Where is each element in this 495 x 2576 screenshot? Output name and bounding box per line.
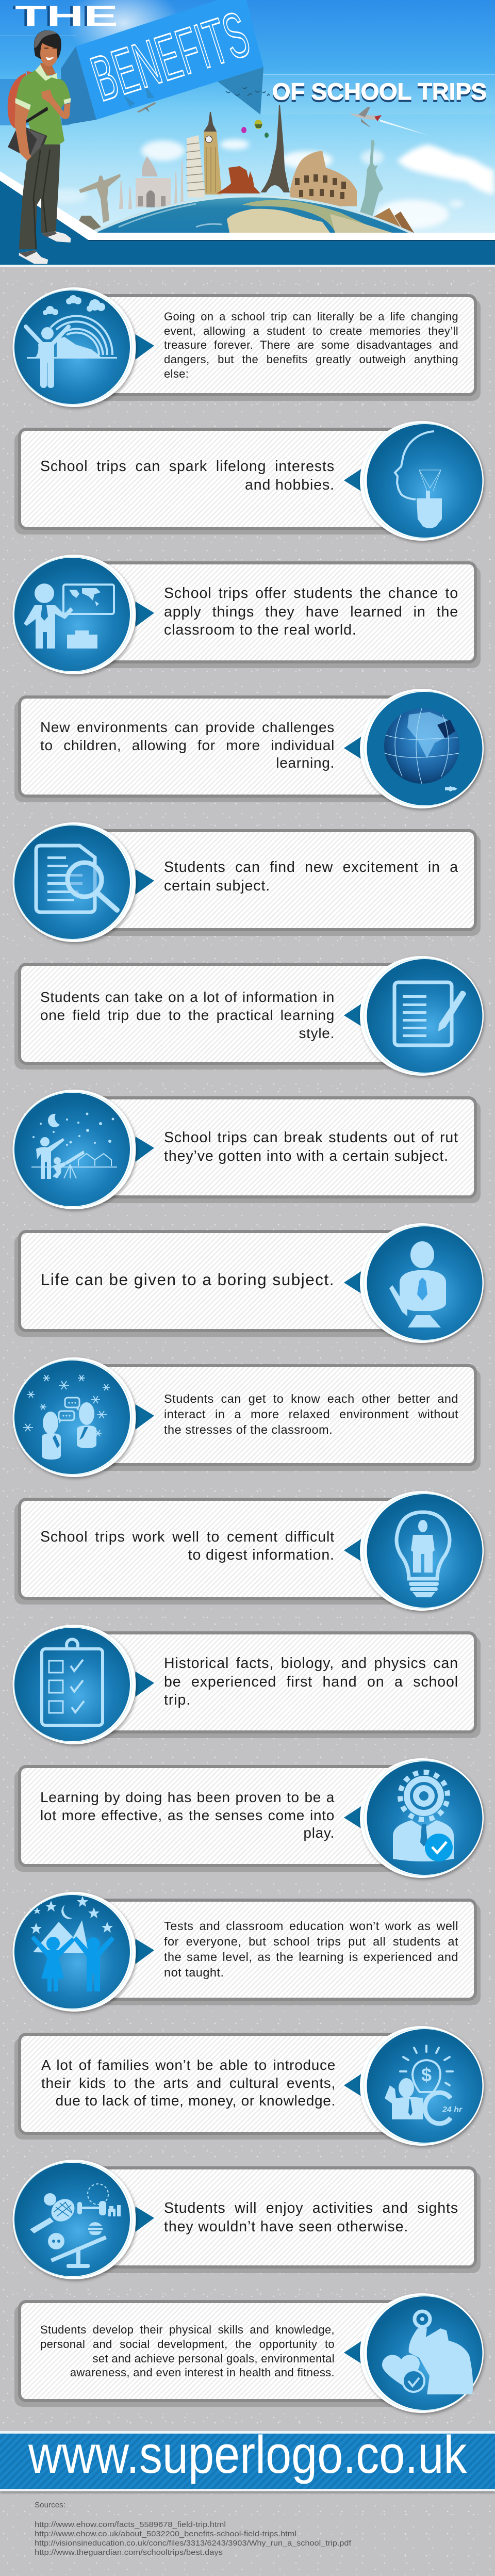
card background <box>93 294 477 396</box>
card background <box>18 1230 402 1332</box>
text: level playing field: not taught. <box>164 1966 224 1979</box>
card background <box>93 1899 477 2001</box>
panel: learning by doing <box>14 1758 487 1881</box>
title: THE <box>12 0 118 32</box>
source links: http://www.ehow.com/facts_5589678_field-trip.html <box>35 2520 226 2529</box>
airplane near ribbon <box>124 84 156 112</box>
text: activities and sights: Students will enjoy activities and sights <box>164 2200 458 2216</box>
student character <box>8 30 71 264</box>
text: get to know each other: the stresses of the classroom. <box>164 1423 333 1436</box>
text: get to know each other: interact in a more relaxed environment without <box>164 1407 458 1421</box>
sky glow <box>67 0 180 62</box>
icon: conversation in snow <box>12 1357 155 1481</box>
source links: http://www.theguardian.com/schooltrips/best.days <box>35 2548 223 2557</box>
icon: teacher with world map <box>12 554 155 678</box>
text: new environments: New environments can provide challenges <box>40 719 335 735</box>
landmark: Big Ben <box>204 112 222 195</box>
text: level playing field <box>164 1919 458 1979</box>
card background <box>93 2166 477 2269</box>
landmark: Statue of Liberty <box>359 140 383 221</box>
text: physical and personal development: awareness, and even interest in health and fitness. <box>70 2366 335 2379</box>
birds <box>226 87 270 96</box>
panel: get to know each other <box>12 1357 481 1481</box>
text: arts and cultural events: A lot of families won’t be able to introduce <box>41 2057 336 2073</box>
card background <box>18 963 402 1065</box>
landmark: pyramids <box>374 208 414 233</box>
icon: jigsaw globe <box>343 688 487 812</box>
icon: notepad and pen <box>343 955 487 1079</box>
title: THE: THE <box>15 0 118 32</box>
panel: arts and cultural events <box>14 2026 487 2149</box>
text: introduction: dangers, but the benefits greatly outweigh anything <box>164 353 458 366</box>
card background <box>18 695 402 798</box>
text: new environments <box>40 719 335 771</box>
landmark: Christ the Redeemer <box>79 174 121 223</box>
panel: new excitement <box>12 822 481 945</box>
text: boring subject: Life can be given to a boring subject. <box>41 1270 335 1289</box>
sources heading: Sources: <box>35 2501 65 2509</box>
landmark: Mayan pyramid <box>74 216 101 231</box>
panel: apply learning <box>12 554 481 678</box>
text: practical learning: one field trip due to the practical learning <box>40 1007 335 1023</box>
text: get to know each other <box>164 1392 458 1436</box>
text: introduction <box>164 310 458 380</box>
panel: introduction <box>12 287 481 411</box>
text: learning by doing: play. <box>303 1825 335 1841</box>
text: break out of rut: School trips can break students out of rut <box>164 1129 458 1146</box>
landmark: Eiffel Tower <box>260 105 290 192</box>
text: level playing field: the same level, as the learning is experienced and <box>164 1950 458 1964</box>
card background <box>93 829 477 931</box>
icon: head with light bulb <box>343 421 487 544</box>
text: new excitement <box>164 859 458 894</box>
icon: checklist clipboard <box>12 1624 155 1748</box>
text: learning by doing: lot more effective, as the senses come into <box>40 1807 335 1823</box>
text: introduction: Going on a school trip can literally be a life changing <box>164 310 458 323</box>
text: activities and sights: they wouldn’t have seen otherwise. <box>164 2218 408 2235</box>
icon: document with magnifier <box>12 822 155 945</box>
text: physical and personal development: personal and social development, the opportunity to <box>40 2338 335 2351</box>
icon: person writing <box>343 1223 487 1347</box>
contrail <box>379 119 430 136</box>
text: level playing field: Tests and classroom education won’t work as well <box>164 1919 458 1933</box>
text: get to know each other: Students can get to know each other better and <box>164 1392 458 1405</box>
text: level playing field: for everyone, but school trips put all students at <box>164 1935 458 1948</box>
card background <box>18 428 402 530</box>
card background <box>93 561 477 663</box>
text: experience first hand <box>164 1655 458 1708</box>
ribbon folds <box>61 46 263 125</box>
card background <box>93 1631 477 1733</box>
panel: new environments <box>14 688 487 812</box>
source links: http://www.ehow.co.uk/about_5032200_benefits-school-field-trips.html <box>35 2530 296 2538</box>
card background <box>93 1096 477 1198</box>
source links <box>35 2520 352 2557</box>
card background <box>18 1498 402 1600</box>
icon: businessman, money bulb and clock: $ <box>421 2064 432 2085</box>
landmark: Taj Mahal <box>119 156 184 209</box>
text: lifelong interests: School trips can spark lifelong interests <box>40 458 335 475</box>
card background <box>18 2033 402 2135</box>
panel: cement information <box>14 1491 487 1614</box>
text: introduction: else: <box>164 367 189 380</box>
text: activities and sights <box>164 2199 458 2236</box>
text: introduction: event, allowing a student to create memories they’ll <box>164 325 458 337</box>
text: break out of rut: they’ve gotten into with a certain subject. <box>164 1148 449 1164</box>
panel: level playing field <box>12 1891 481 2015</box>
text: arts and cultural events: their kids to the arts and cultural events, <box>41 2075 336 2091</box>
icon: businessman, money bulb and clock <box>360 2026 484 2146</box>
card background <box>93 1364 477 1466</box>
text: new environments: to children, allowing for more individual <box>40 737 335 753</box>
base shadow line <box>88 240 495 241</box>
ribbon <box>76 0 263 120</box>
text: arts and cultural events <box>41 2056 336 2110</box>
text: experience first hand: trip. <box>164 1692 191 1708</box>
website banner <box>0 2431 495 2491</box>
landmark: Colosseum <box>290 151 357 206</box>
text: experience first hand: Historical facts, biology, and physics can <box>164 1655 458 1672</box>
icon: weightlifter and heart <box>360 2293 484 2413</box>
text: learning by doing: Learning by doing has been proven to be a <box>40 1789 335 1805</box>
airplane right <box>349 107 382 127</box>
text: learning by doing <box>40 1789 335 1841</box>
text: introduction: treasure forever. There are some disadvantages and <box>164 338 458 351</box>
text: practical learning: Students can take on a lot of information in <box>40 989 335 1005</box>
text: practical learning <box>40 989 335 1041</box>
text: lifelong interests: and hobbies. <box>245 477 335 493</box>
text: physical and personal development: set and achieve personal goals, environmental <box>93 2352 335 2365</box>
white strip <box>0 171 495 240</box>
panel: lifelong interests <box>14 421 487 544</box>
title: THE: THE <box>12 0 116 32</box>
panel: break out of rut <box>12 1090 481 1212</box>
panel: practical learning <box>14 955 487 1079</box>
base bottom edge <box>0 265 495 267</box>
title: OF SCHOOL TRIPS: OF SCHOOL TRIPS <box>272 78 487 105</box>
sky bands <box>0 36 495 125</box>
card background <box>18 1765 402 1867</box>
icon: person in light bulb <box>343 1491 487 1614</box>
text: cement information: to digest information. <box>188 1547 335 1563</box>
icon: businessman, money bulb and clock: 24 hr <box>442 2105 463 2114</box>
text: practical learning: style. <box>299 1025 335 1041</box>
icon: gear-head person with check badge <box>343 1758 487 1881</box>
icon: two children on mountains <box>12 1891 155 2015</box>
sky background <box>0 0 495 242</box>
text: apply learning: classroom to the real world. <box>164 622 357 638</box>
source links: http://visionsineducation.co.uk/conc/files/3313/6243/3903/Why_run_a_school_trip.pdf <box>35 2539 352 2548</box>
text: arts and cultural events: due to lack of time, money, or knowledge. <box>56 2093 336 2109</box>
panel: physical and personal development <box>0 2293 495 2415</box>
globe <box>95 195 414 233</box>
panel: experience first hand <box>12 1624 481 1748</box>
icon: sports and balance <box>12 2160 136 2279</box>
landmark: butte <box>217 166 260 193</box>
dark blue base <box>0 181 495 265</box>
text: new excitement: Students can find new excitement in a <box>164 859 458 876</box>
icon: person with rainbow <box>12 287 155 411</box>
text: new environments: learning. <box>276 755 335 771</box>
icon: stargazing <box>12 1090 155 1212</box>
text: experience first hand: be experienced first hand on a school <box>164 1674 458 1690</box>
text: apply learning: School trips offer students the chance to <box>164 585 458 602</box>
text: cement information <box>40 1528 335 1563</box>
clouds <box>46 139 494 229</box>
card background <box>18 2300 402 2402</box>
text: cement information: School trips work well to cement difficult <box>40 1528 335 1545</box>
header illustration <box>0 0 495 267</box>
text: break out of rut <box>164 1129 458 1164</box>
balloons <box>241 120 269 138</box>
text: apply learning: apply things they have learned in the <box>164 604 458 620</box>
text: new excitement: certain subject. <box>164 878 270 894</box>
panel: activities and sights <box>0 2160 495 2281</box>
text: lifelong interests <box>40 458 335 493</box>
website address: www.superlogo.co.uk <box>28 2426 467 2484</box>
landmark: Leaning Tower of Pisa <box>186 135 205 198</box>
text: physical and personal development <box>40 2323 335 2380</box>
title: OF SCHOOL TRIPS: OF SCHOOL TRIPS <box>272 80 487 107</box>
text: apply learning <box>164 585 458 638</box>
sources <box>0 2497 495 2559</box>
text: physical and personal development: Students develop their physical skills and knowledge, <box>40 2323 335 2336</box>
panel: boring subject <box>14 1223 487 1347</box>
